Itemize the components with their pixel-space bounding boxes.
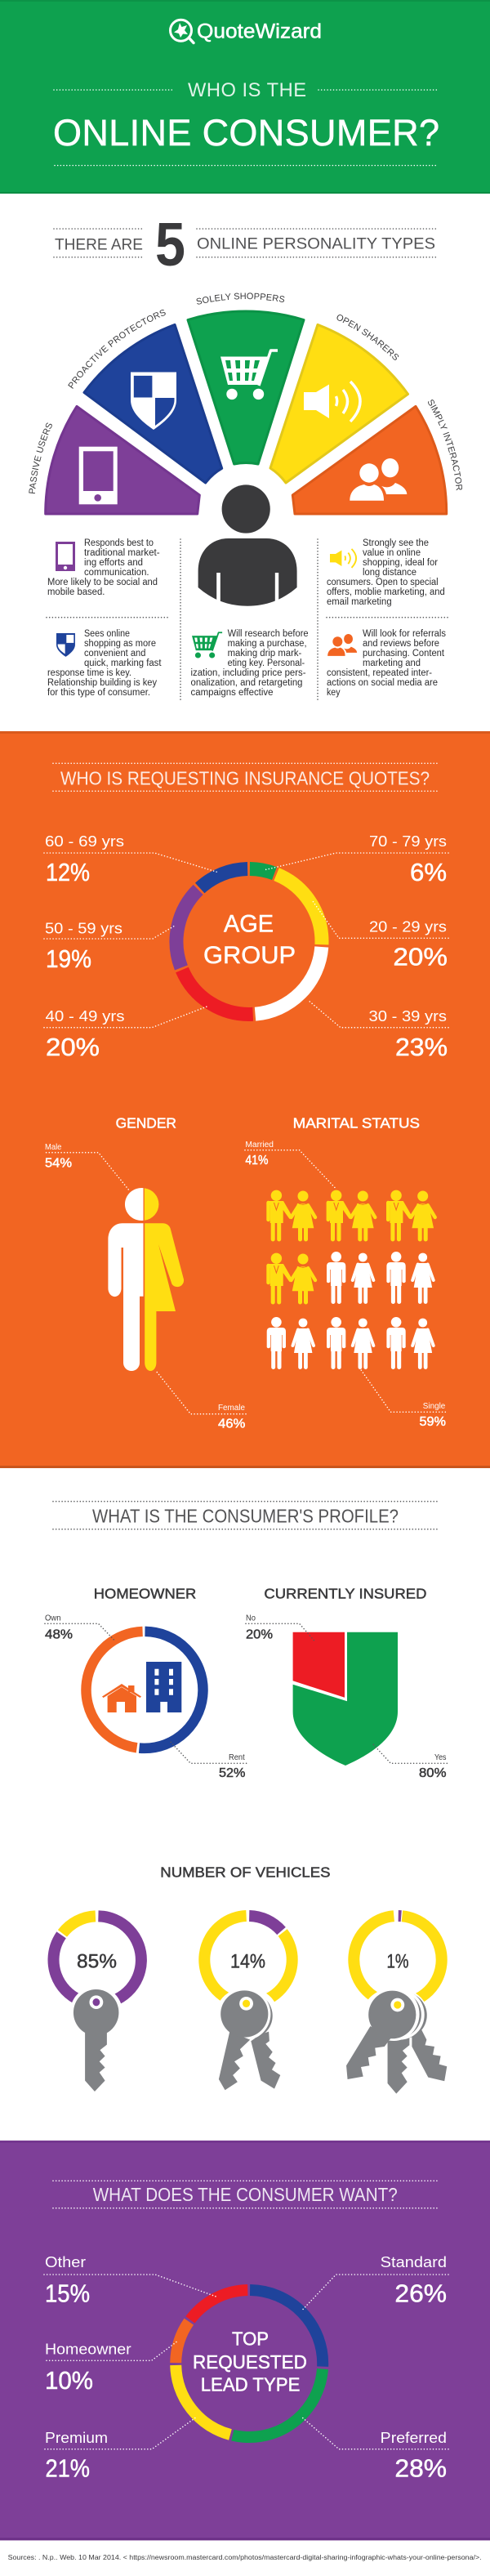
text block: simply interactor: purchasing. Content [363, 649, 445, 659]
icon: person silhouette [198, 484, 297, 606]
heading: there are 5 online personality types [54, 210, 438, 279]
text block: solely shoppers: making drip mark- [228, 649, 301, 659]
text block: simply interactor [327, 629, 446, 698]
stat: preferred [381, 2429, 447, 2483]
stat: 40-49 yrs [46, 1008, 124, 1061]
icon: cart [220, 350, 278, 400]
title: online consumer: ONLINE CONSUMER? [53, 112, 439, 154]
chart: top requested lead type ring: LEAD TYPE [201, 2374, 300, 2395]
text block: solely shoppers: campaigns effective [191, 688, 273, 698]
icon: phone [79, 447, 118, 504]
chart: top requested lead type ring [146, 2261, 352, 2467]
chart: two vehicles 14% [187, 1898, 310, 2090]
text block: passive users [47, 538, 160, 597]
text block: open sharers: Strongly see the [363, 538, 429, 548]
stat: 30-39 yrs: 23% [395, 1033, 448, 1061]
stat: 30-39 yrs: 30 - 39 yrs [369, 1008, 447, 1025]
chart: homeowner ring [78, 1624, 211, 1756]
icon: QuoteWizard logo: QuoteWizard [197, 20, 322, 43]
icon: small people [327, 634, 357, 656]
stat: 50-59 yrs: 50 - 59 yrs [45, 920, 122, 936]
segment: passive users [46, 406, 199, 514]
icon: half male half female figure [108, 1188, 184, 1371]
chart: insured shield [293, 1632, 398, 1766]
text block: passive users: communication. [84, 568, 149, 578]
heading: marital status: MARITAL STATUS [293, 1115, 420, 1132]
heading: homeowner: HOMEOWNER [94, 1586, 196, 1602]
label: solely shoppers: SOLELY SHOPPERS [196, 292, 284, 305]
text block: solely shoppers: ization, including price pers- [191, 668, 306, 678]
stat: rent [219, 1753, 246, 1780]
stat: no: No [246, 1614, 256, 1623]
stat: 40-49 yrs: 40 - 49 yrs [46, 1008, 124, 1025]
stat: yes: Yes [434, 1753, 446, 1762]
stat: 70-79 yrs: 70 - 79 yrs [369, 833, 447, 850]
text block: open sharers: offers, moblie marketing, and [327, 587, 445, 597]
text block: proactive protectors: response time is key. [47, 668, 131, 678]
label: proactive protectors: PROACTIVE PROTECTORS [68, 310, 166, 389]
stat: single: Single [423, 1402, 446, 1411]
text block: passive users: mobile based. [47, 587, 105, 597]
heading: there are 5 online personality types: THERE ARE [55, 237, 143, 254]
stat: homeowner: 10% [45, 2366, 93, 2395]
chart: top requested lead type ring: REQUESTED [193, 2351, 307, 2373]
stat: 85%: 85% [77, 1951, 117, 1972]
stat: standard [381, 2253, 447, 2307]
label: open sharers: OPEN SHARERS [336, 315, 399, 360]
chart: top requested lead type ring: TOP [232, 2328, 269, 2350]
stat: homeowner: Homeowner [45, 2341, 131, 2358]
heading: currently insured: CURRENTLY INSURED [264, 1586, 426, 1602]
chart: age group ring: AGE [224, 911, 274, 938]
segment: proactive protectors [84, 324, 222, 483]
icon: single key [70, 1986, 122, 2092]
label: simply interactor: SIMPLY INTERACTOR [428, 400, 462, 490]
stat: 60-69 yrs: 60 - 69 yrs [45, 833, 124, 850]
text block: solely shoppers: eting key. Personal- [228, 659, 305, 668]
text block: simply interactor: key [327, 688, 341, 698]
text block: proactive protectors: for this type of consumer. [47, 688, 150, 698]
stat: single: 59% [420, 1415, 446, 1429]
text block: passive users: Responds best to [84, 538, 154, 548]
stat: male [45, 1143, 72, 1170]
stat: standard: 26% [394, 2279, 447, 2307]
stat: 14%: 14% [230, 1951, 265, 1972]
chart: three vehicles 1% [346, 1912, 447, 2094]
stat: 1%: 1% [387, 1951, 408, 1972]
icon: speaker [304, 382, 360, 422]
heading: who is requesting insurance quotes: WHO IS REQUESTING INSURANCE QUOTES? [60, 768, 430, 789]
stat: 70-79 yrs [369, 833, 447, 886]
text block: simply interactor: consistent, repeated inter- [327, 668, 432, 678]
segment: simply interactor [292, 406, 447, 514]
heading: number of vehicles: NUMBER OF VEHICLES [160, 1864, 330, 1880]
chart: age group ring: GROUP [203, 942, 296, 969]
panel: who is requesting quotes [0, 731, 490, 1468]
stat: married: 41% [245, 1154, 269, 1167]
heading: what does the consumer want: WHAT DOES THE CONSUMER WANT? [93, 2184, 398, 2205]
text block: open sharers: email marketing [327, 597, 392, 607]
stat: 20-29 yrs: 20 - 29 yrs [369, 919, 447, 935]
text block: open sharers [327, 538, 445, 607]
icon: small speaker [330, 549, 356, 568]
text block: open sharers: long distance [363, 568, 416, 578]
heading: there are 5 online personality types: 5 [155, 210, 185, 279]
text block: proactive protectors: Sees online [84, 629, 130, 639]
stat: rent: 52% [219, 1766, 246, 1780]
icon: apartment building [146, 1662, 181, 1712]
stat: yes [419, 1753, 447, 1780]
stat: single [420, 1402, 446, 1429]
pictogram: married and single couples [267, 1190, 435, 1368]
heading: gender: GENDER [116, 1115, 176, 1132]
icon: house [102, 1684, 141, 1712]
chart: one vehicle 85% [36, 1899, 158, 2092]
stat: 60-69 yrs [45, 833, 124, 886]
stat: no [246, 1614, 273, 1642]
text block: proactive protectors: Relationship building is key [47, 678, 157, 688]
stat: premium [45, 2429, 108, 2483]
text block: proactive protectors: shopping as more [84, 639, 156, 649]
stat: other [45, 2253, 90, 2307]
chart: personality type fan [29, 292, 462, 606]
stat: no: 20% [246, 1628, 273, 1642]
text block: proactive protectors [47, 629, 162, 698]
chart: age group ring [146, 839, 352, 1044]
text block: passive users: ing efforts and [84, 558, 143, 568]
icon: three keys [346, 1988, 447, 2094]
icon: people [350, 458, 407, 501]
stat: 30-39 yrs [369, 1008, 448, 1061]
stat: married [245, 1141, 274, 1167]
text block: open sharers: shopping, ideal for [363, 558, 438, 568]
text block: passive users: traditional market- [84, 548, 160, 558]
stat: homeowner [45, 2341, 131, 2395]
stat: male: Male [45, 1143, 62, 1152]
text block: solely shoppers [191, 629, 309, 698]
segment: solely shoppers [188, 311, 304, 464]
label: passive users: PASSIVE USERS [29, 423, 52, 493]
text block: solely shoppers: Will research before [228, 629, 309, 639]
stat: 50-59 yrs: 19% [46, 944, 91, 973]
sources footer: Sources: . N.p.. Web. 10 Mar 2014. < https://newsroom.mastercard.com/photos/mastercard-digital-sharing-infographic-whats-your-online-persona/>. [8, 2554, 482, 2561]
text block: simply interactor: and reviews before [363, 639, 439, 649]
panel: header [0, 0, 490, 194]
text block: solely shoppers: onalization, and retargeting [191, 678, 302, 688]
heading: there are 5 online personality types: ONLINE PERSONALITY TYPES [197, 235, 435, 253]
stat: own [45, 1614, 73, 1642]
text block: simply interactor: Will look for referrals [363, 629, 446, 639]
stat: 40-49 yrs: 20% [46, 1033, 100, 1061]
stat: 60-69 yrs: 12% [46, 858, 90, 886]
stat: other: Other [45, 2253, 86, 2270]
text block: open sharers: consumers. Open to special [327, 578, 439, 587]
stat: own: Own [45, 1614, 61, 1623]
icon: small shield [56, 633, 75, 657]
stat: 50-59 yrs [45, 920, 122, 973]
heading: what is the consumer's profile: WHAT IS THE CONSUMER'S PROFILE? [92, 1505, 399, 1526]
text block: simply interactor: actions on social media are [327, 678, 438, 688]
text block: proactive protectors: convenient and [84, 649, 145, 659]
icon: small phone [56, 542, 75, 571]
stat: male: 54% [45, 1156, 72, 1170]
icon: small cart [192, 632, 222, 659]
text block: proactive protectors: quick, marking fast [84, 659, 162, 668]
text block: simply interactor: marketing and [363, 659, 421, 668]
text block: open sharers: value in online [363, 548, 421, 558]
stat: 20-29 yrs [369, 919, 448, 971]
stat: standard: Standard [381, 2253, 447, 2270]
stat: female: Female [218, 1404, 245, 1413]
stat: preferred: 28% [394, 2454, 447, 2483]
stat: yes: 80% [419, 1766, 447, 1780]
stat: premium: 21% [46, 2454, 90, 2483]
stat: rent: Rent [229, 1753, 245, 1762]
stat: 70-79 yrs: 6% [410, 858, 447, 886]
stat: female: 46% [218, 1417, 246, 1431]
segment: open sharers [270, 324, 408, 483]
icon: two keys [216, 1988, 280, 2090]
title line: who is the: WHO IS THE [188, 80, 306, 101]
text block: solely shoppers: making a purchase, [228, 639, 307, 649]
stat: preferred: Preferred [381, 2429, 447, 2446]
stat: own: 48% [45, 1628, 73, 1642]
stat: 20-29 yrs: 20% [393, 943, 448, 971]
panel: what does the consumer want [0, 2141, 490, 2540]
text block: passive users: More likely to be social and [47, 578, 158, 587]
stat: other: 15% [45, 2279, 90, 2307]
stat: female [218, 1404, 246, 1431]
icon: shield [131, 373, 176, 430]
stat: married: Married [245, 1141, 274, 1150]
stat: premium: Premium [45, 2429, 108, 2446]
